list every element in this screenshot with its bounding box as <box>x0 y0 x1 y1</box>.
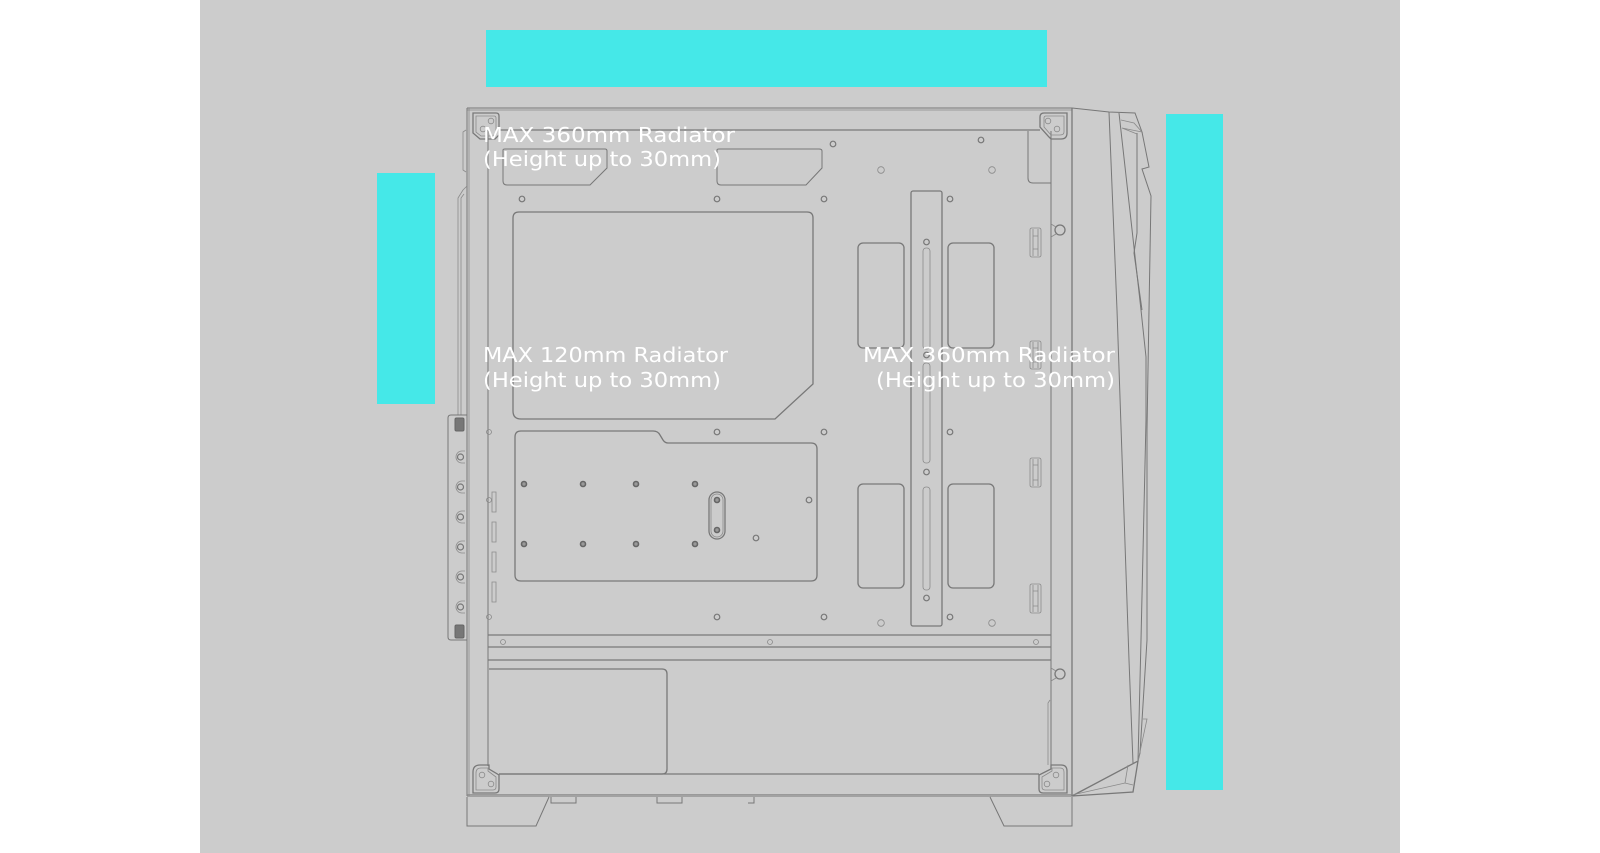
upper cut-outs <box>503 131 1051 419</box>
chassis frame <box>458 108 1072 796</box>
label: front radiator <box>863 343 1116 392</box>
front radiator zone <box>1166 114 1223 790</box>
label: top radiator <box>483 123 736 171</box>
PSU cut-out <box>489 669 667 774</box>
rear radiator zone <box>377 173 435 404</box>
corner brackets <box>473 113 1067 793</box>
label: rear radiator <box>483 343 729 392</box>
cable bar with windows <box>858 191 994 626</box>
feet <box>467 797 1072 826</box>
cable clips and grommets <box>1030 224 1065 681</box>
standoff holes <box>486 137 1038 644</box>
label: front radiator: MAX 360mm Radiator <box>863 343 1116 367</box>
label: top radiator: MAX 360mm Radiator <box>483 123 736 147</box>
motherboard cut-out <box>492 431 817 602</box>
label: front radiator: (Height up to 30mm) <box>876 368 1115 392</box>
label: rear radiator: MAX 120mm Radiator <box>483 343 729 367</box>
front bezel <box>1072 108 1151 796</box>
label: top radiator: (Height up to 30mm) <box>483 147 721 171</box>
case line drawing <box>448 108 1151 826</box>
top radiator zone <box>486 30 1047 87</box>
front I/O panel <box>448 415 467 640</box>
label: rear radiator: (Height up to 30mm) <box>483 368 721 392</box>
